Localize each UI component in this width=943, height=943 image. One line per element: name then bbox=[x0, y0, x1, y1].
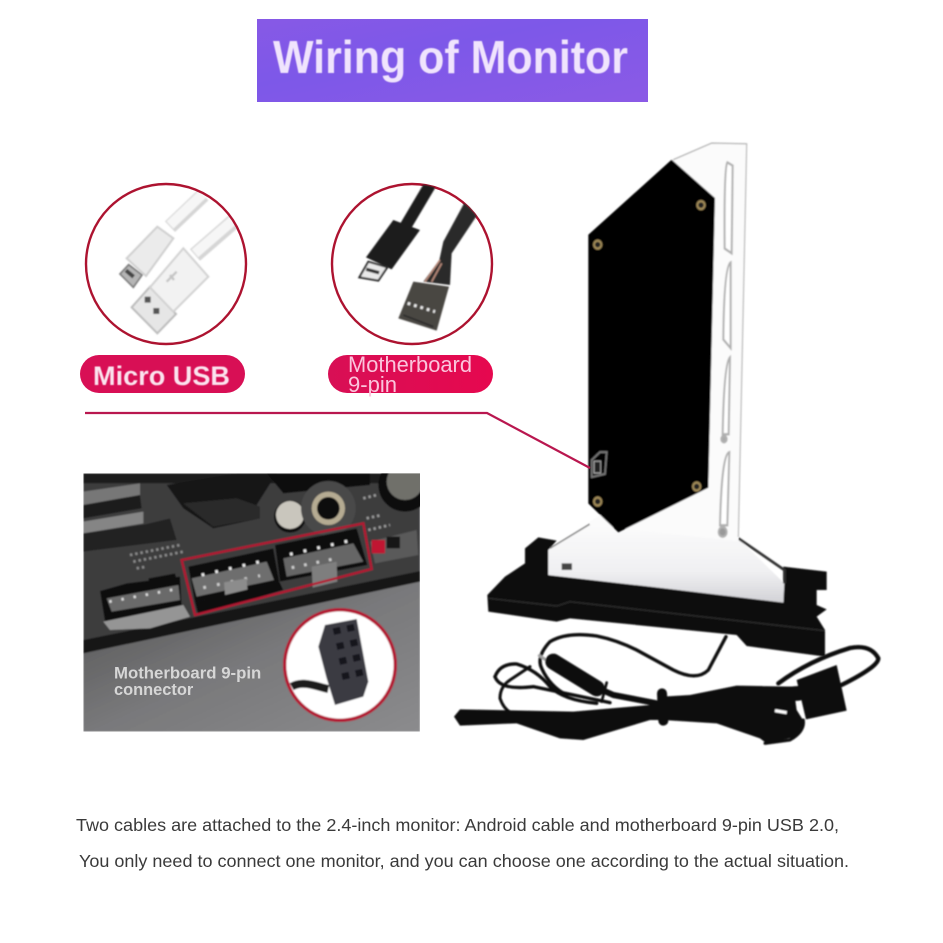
plate edge bbox=[673, 143, 747, 537]
description text: Two cables are attached to the 2.4-inch monitor: Android cable and motherboard 9-pin USB 2.0, bbox=[76, 815, 839, 835]
label: Motherboard 9-pin: Motherboard bbox=[348, 352, 472, 377]
circle outlines bbox=[86, 184, 492, 344]
red highlight box bbox=[182, 523, 372, 615]
white plate upper bbox=[590, 143, 747, 541]
stand base bbox=[487, 524, 827, 657]
left loops bbox=[495, 664, 597, 703]
label: Micro USB: Micro USB bbox=[93, 361, 230, 391]
USB port bbox=[592, 452, 607, 477]
base lower edge shade bbox=[489, 598, 825, 631]
connector neck bbox=[778, 693, 798, 695]
white plate lower bbox=[548, 524, 784, 603]
plate slots bbox=[719, 162, 733, 537]
monitor stand product bbox=[588, 143, 747, 541]
label: Micro USB bbox=[80, 355, 245, 393]
micro USB plug bbox=[539, 656, 657, 703]
motherboard photo panel bbox=[83, 458, 432, 732]
label: Motherboard 9-pin bbox=[328, 352, 493, 397]
mounting screws bbox=[594, 201, 705, 505]
small sticker bbox=[562, 563, 572, 570]
board edge bbox=[83, 571, 420, 653]
carpet background bbox=[83, 580, 420, 732]
main bundle mass bbox=[454, 686, 804, 743]
inset circle with connector bbox=[285, 610, 395, 720]
leader line bbox=[85, 413, 590, 468]
photo caption: Motherboard 9-pin bbox=[114, 664, 261, 683]
icon: black cables bbox=[359, 185, 478, 331]
cable bundle bbox=[454, 635, 878, 743]
pin headers bbox=[188, 528, 367, 615]
left pin header bbox=[100, 573, 190, 630]
upper board components bbox=[83, 473, 420, 570]
black display back panel bbox=[588, 160, 715, 532]
board surface bbox=[83, 473, 420, 732]
description text: You only need to connect one monitor, and you can choose one according to the actual situation. bbox=[79, 851, 849, 871]
photo caption: connector bbox=[114, 680, 194, 699]
cable tie bbox=[662, 693, 663, 721]
callout: micro USB cable bbox=[120, 194, 233, 333]
bundle gaps bbox=[775, 711, 787, 713]
right loop bbox=[778, 647, 878, 685]
square connector bbox=[797, 665, 847, 719]
description text bbox=[76, 815, 849, 871]
icon: white USB cables bbox=[120, 194, 233, 333]
lower thin loop bbox=[765, 720, 803, 743]
title text: Wiring of Monitor bbox=[273, 31, 628, 83]
callout: motherboard 9-pin cable bbox=[359, 185, 478, 331]
label: Motherboard 9-pin: 9-pin bbox=[348, 372, 397, 397]
title banner bbox=[257, 19, 648, 102]
flat cable from base bbox=[540, 635, 726, 695]
